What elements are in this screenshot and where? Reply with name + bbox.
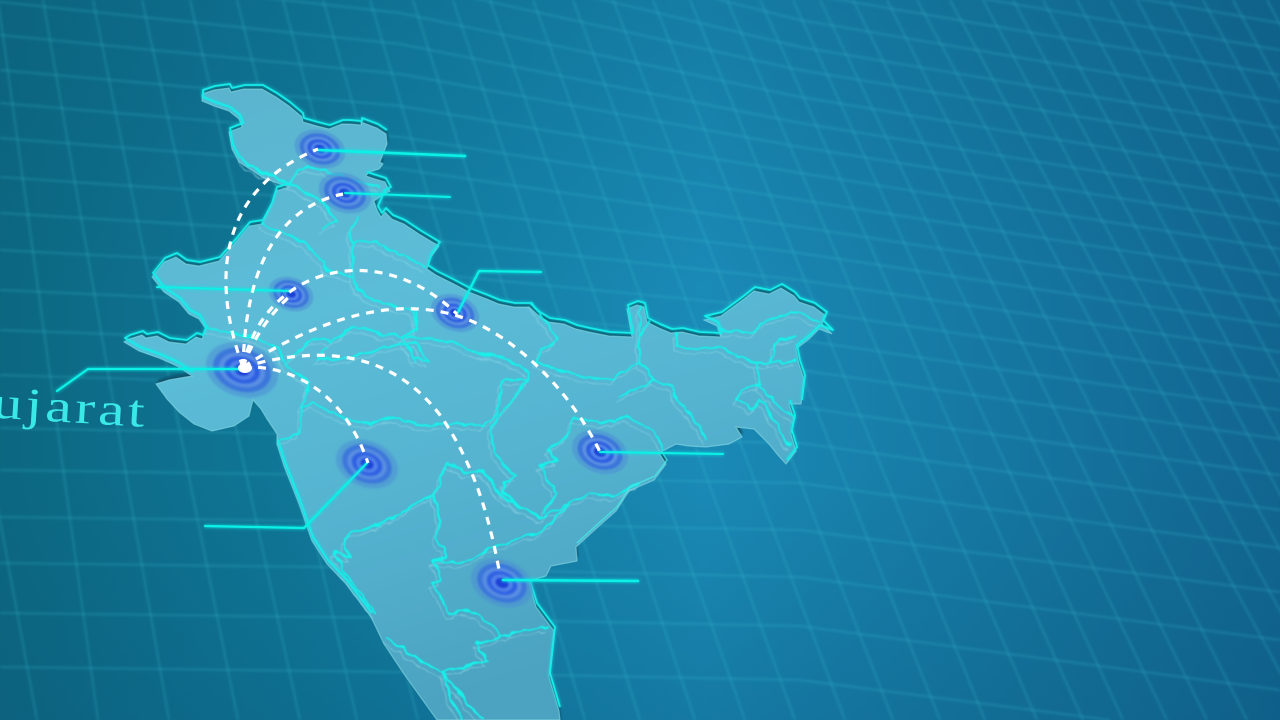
leader: Maharashtra: [205, 463, 367, 528]
arc to Uttar Pradesh: [243, 270, 457, 367]
leader: Uttar Pradesh: [457, 271, 541, 314]
map land fill: [124, 88, 832, 720]
state boundaries, pale echo: [204, 163, 817, 720]
leader: Kashmir: [318, 150, 465, 156]
pulse marker: Himachal: [313, 165, 377, 221]
leader: Andhra: [503, 580, 638, 581]
arc to Himachal: [243, 194, 343, 367]
arc to Kashmir: [226, 149, 318, 367]
pulse marker: Gujarat origin: [199, 333, 285, 407]
pulse marker: Odisha: [565, 422, 635, 482]
origin hub highlight: [238, 363, 252, 373]
dashed connection arcs from Gujarat: [226, 149, 600, 575]
arc to Rajasthan: [243, 296, 290, 367]
pulse marker: Rajasthan: [264, 271, 318, 317]
arc to Odisha: [243, 309, 600, 452]
leader: Odisha: [600, 452, 723, 454]
arc to Maharashtra: [243, 367, 368, 463]
state boundaries, cyan: [207, 158, 820, 720]
arc to Andhra: [243, 355, 500, 575]
pulse marker: Kashmir: [289, 123, 351, 175]
callout leader lines: [57, 150, 723, 581]
map of India: [124, 84, 833, 720]
coastline and border outline: [125, 84, 833, 707]
pulse marker: Andhra: [464, 550, 540, 616]
map extrusion shadow: [125, 84, 833, 720]
leader: Rajasthan: [157, 287, 290, 291]
leader: Gujarat: [57, 369, 240, 391]
pulse marker: Uttar Pradesh: [425, 287, 485, 339]
pulse marker: Maharashtra: [329, 431, 405, 497]
pale east coast edge: [577, 452, 667, 543]
leader: Himachal: [345, 193, 450, 197]
